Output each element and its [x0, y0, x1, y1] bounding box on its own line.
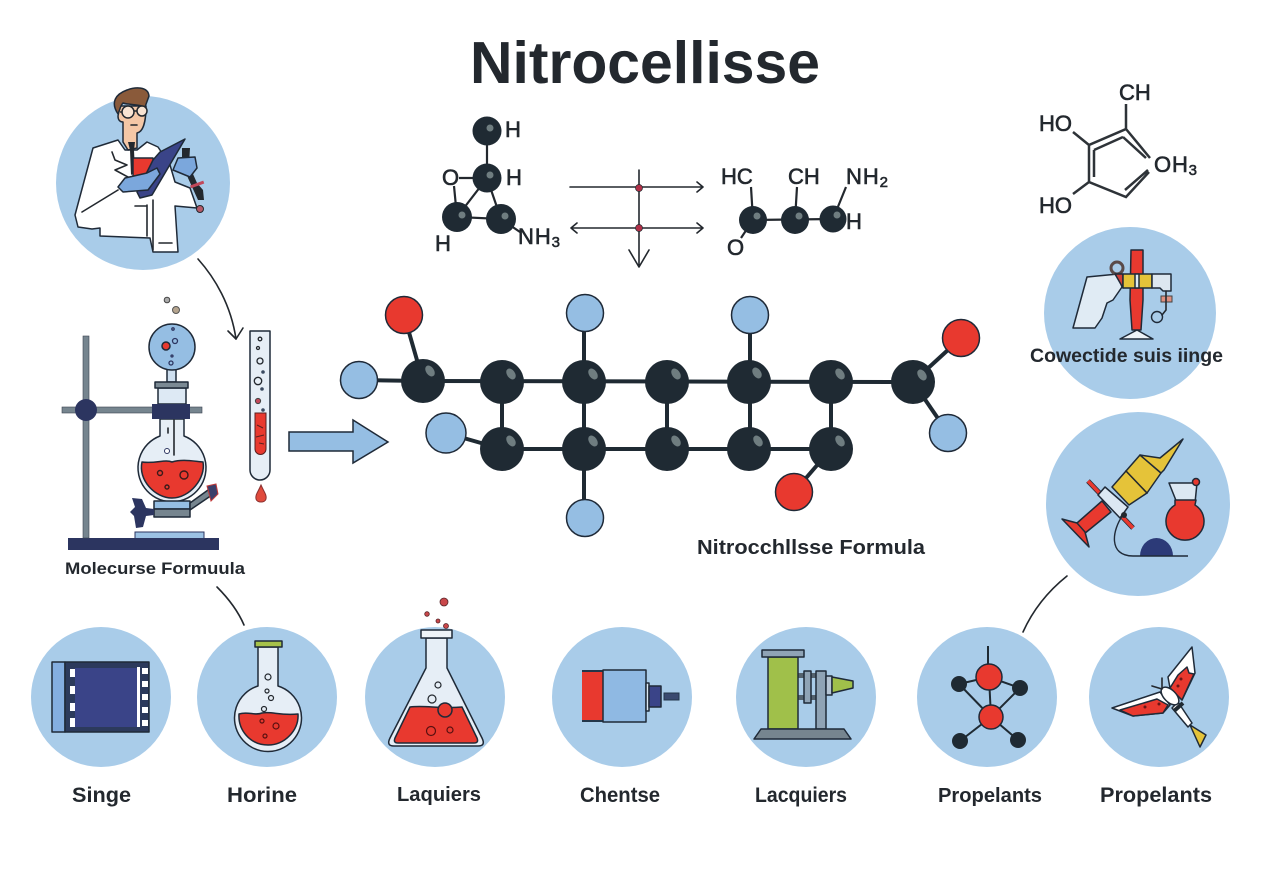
cloth [1073, 274, 1122, 328]
panel: Propelants wing: Propelants [1100, 784, 1212, 807]
label: Cowectide suis iinge [1030, 346, 1223, 367]
title: Nitrocellisse [470, 30, 820, 96]
burner [154, 501, 190, 509]
small molecule left: H [506, 165, 522, 190]
red post [1130, 250, 1143, 330]
panel: Horine [197, 627, 337, 807]
red atoms [386, 296, 980, 510]
panel: Chentse: Chentse [580, 784, 660, 807]
panel: coating circle [1030, 227, 1223, 399]
red flask [1169, 483, 1197, 503]
ring structure [1039, 80, 1197, 218]
panel: Singe [31, 627, 171, 807]
ring structure: OH [1154, 152, 1188, 177]
panel: Horine: Horine [227, 784, 297, 807]
scientist neck and face [118, 106, 146, 150]
red notebook [133, 158, 153, 177]
panel: Laquiers flask: Laquiers [397, 784, 481, 806]
small molecule right: 2 [880, 174, 888, 191]
small molecule left: NH [518, 224, 551, 249]
panel: syringe circle [1046, 412, 1230, 596]
small molecule left: O [442, 165, 459, 190]
lower wing [1112, 692, 1170, 716]
arrow: to molecule [289, 420, 388, 463]
scientist glasses [120, 106, 147, 118]
ring structure: HO [1039, 111, 1072, 136]
carbon atoms [401, 359, 935, 471]
clamp block [152, 404, 190, 419]
panel: Laquiers flask [365, 598, 505, 806]
bonds [359, 313, 961, 518]
panel: scientist [56, 88, 230, 270]
small molecule right [721, 164, 888, 260]
ring structure: CH [1119, 80, 1151, 105]
test tube [250, 331, 270, 502]
scientist tie [128, 142, 135, 175]
barrel [1098, 487, 1128, 518]
small molecule right: HC [721, 164, 753, 189]
small molecule left [435, 116, 560, 256]
blue atoms [340, 294, 966, 536]
reaction arrows [570, 170, 703, 267]
small molecule right: O [727, 235, 744, 260]
ring [1111, 262, 1123, 274]
clipboard [137, 139, 185, 198]
sprockets [70, 667, 148, 727]
panel: Propelants molecule [917, 627, 1057, 807]
arrow: scientist to tube [198, 259, 243, 339]
vial in hand [182, 148, 204, 200]
top bulb [167, 368, 176, 382]
panel: Chentse [552, 627, 692, 807]
panel: Lacquiers machine [736, 627, 876, 807]
connector: bottom left [217, 587, 244, 625]
stand rods [83, 336, 89, 538]
scientist hair [114, 88, 149, 114]
small molecule right: NH [846, 164, 879, 189]
flask liquid [141, 460, 203, 498]
small molecule right: CH [788, 164, 820, 189]
gloves [118, 168, 160, 192]
needle [1140, 439, 1183, 473]
metal arm [1152, 274, 1171, 291]
panel: Propelants molecule: Propelants [938, 785, 1042, 807]
stand base [135, 532, 204, 539]
atom highlights [423, 364, 929, 448]
scientist coat [75, 140, 197, 252]
upper wing [1168, 647, 1195, 700]
panel: Propelants wing [1089, 627, 1229, 807]
round flask [138, 419, 206, 502]
ring structure: HO [1039, 193, 1072, 218]
base [1120, 330, 1153, 339]
chart: main molecule [340, 294, 980, 536]
caption: Molecurse Formuula [65, 559, 246, 578]
connector: right [1023, 576, 1067, 632]
panel: Lacquiers machine: Lacquiers [755, 784, 847, 807]
small molecule left: 3 [552, 234, 560, 251]
panel: lab apparatus [62, 297, 246, 578]
caption: formula: Nitrocchllsse Formula [697, 537, 926, 559]
small molecule left: H [505, 117, 521, 142]
panel: Singe: Singe [72, 784, 131, 807]
small molecule left: H [435, 231, 451, 256]
tail [1172, 702, 1192, 727]
red drop [256, 485, 266, 502]
body [1158, 684, 1182, 708]
plunger [1077, 501, 1111, 534]
wire and dome [1140, 538, 1173, 556]
ring structure: 3 [1189, 162, 1197, 179]
yellow band [1123, 274, 1152, 288]
small molecule right: H [846, 209, 862, 234]
yellow body [1112, 455, 1161, 505]
neck and collar [158, 388, 186, 404]
